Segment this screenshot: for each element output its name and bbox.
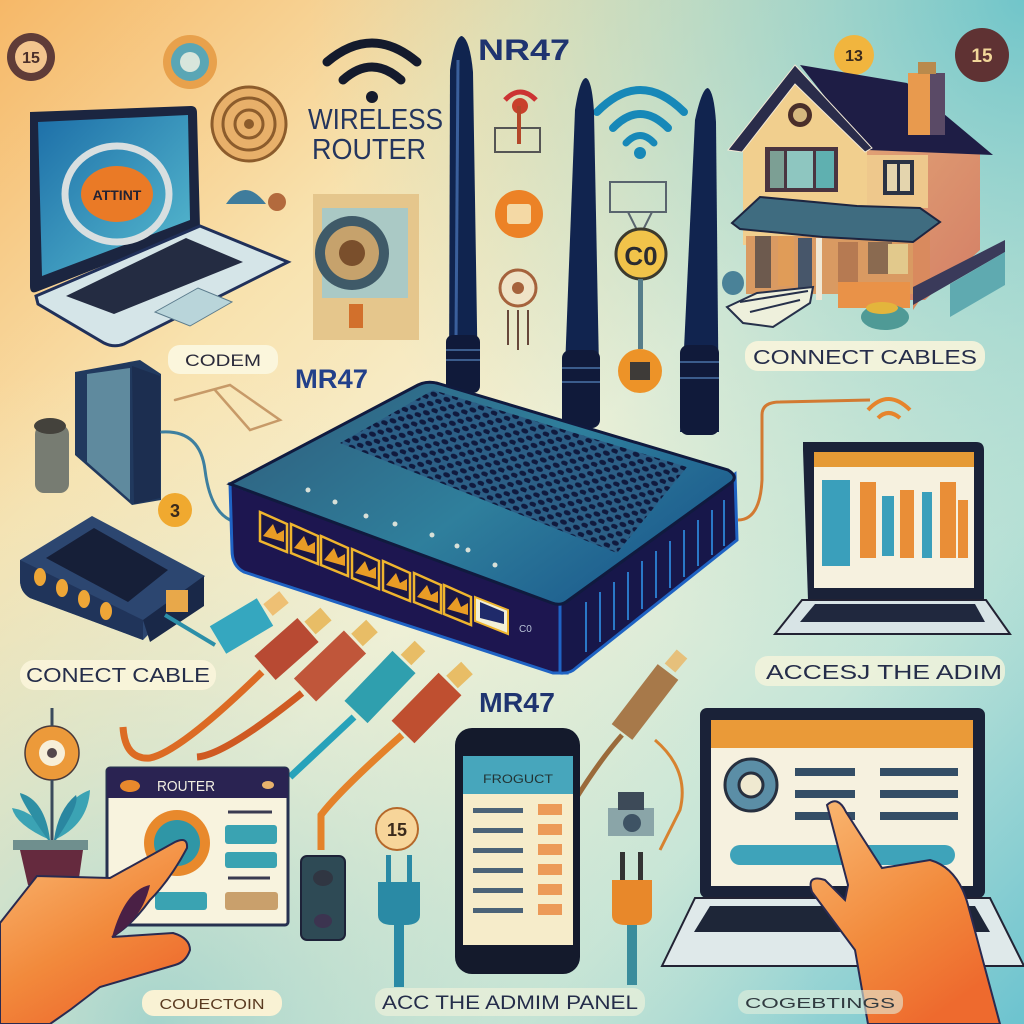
plug: teal [378, 855, 420, 987]
icon: round dial [212, 87, 286, 161]
label: access the admin [755, 656, 1005, 686]
hand right [811, 801, 1000, 1024]
label: NR47 top: NR47 [478, 34, 570, 67]
badge: top left 15: 15 [22, 50, 40, 67]
icon: wifi dark [327, 43, 417, 103]
heading: wireless router [308, 104, 443, 166]
icon: box sketch [610, 182, 666, 236]
label: connect cables: CONNECT CABLES [753, 347, 977, 369]
badge: top right 15: 15 [971, 46, 993, 67]
icon: small connector [226, 190, 286, 211]
label: connection: COUECTOIN [160, 996, 264, 1013]
phone [455, 728, 580, 974]
badge: 15 bottom [376, 808, 418, 850]
sketch: wires [162, 385, 280, 520]
cable: orange [123, 614, 326, 758]
phone: FROGUCT [483, 772, 554, 786]
label: conect cable [20, 660, 216, 690]
icon: small wifi right [868, 399, 910, 418]
label: connect cables [745, 341, 985, 371]
router ports [260, 512, 508, 634]
router speckled vent [340, 390, 687, 553]
house [722, 62, 1005, 330]
badge: 3 [158, 493, 192, 527]
badge: 15 bottom: 15 [387, 820, 407, 840]
main router: C0 [519, 624, 532, 635]
modem device left [34, 360, 161, 505]
icon: target dial top [163, 35, 217, 89]
plug: orange [612, 852, 652, 985]
connector box [301, 856, 345, 940]
router front face [230, 484, 567, 673]
label: acc the admin panel: ACC THE ADMIM PANEL [382, 993, 638, 1014]
label: MR47 middle: MR47 [295, 364, 368, 394]
icon: yellow timer [616, 229, 666, 393]
label: codem [168, 345, 278, 374]
label: cosettings [738, 990, 903, 1014]
badge: top right 15 [955, 28, 1009, 82]
cable: teal [290, 646, 420, 777]
laptop bottom right [662, 708, 1024, 966]
heading: wireless router: ROUTER [312, 134, 426, 166]
laptop top left [30, 106, 288, 346]
wire: orange right [655, 740, 682, 850]
label: codem: CODEM [185, 351, 261, 370]
panel: fan speaker [313, 194, 419, 340]
panel: router screen: ROUTER [157, 778, 215, 795]
wire to laptop [738, 400, 870, 520]
badge: 3: 3 [170, 501, 180, 521]
antennas [446, 36, 719, 435]
icon: usb lock [608, 792, 654, 836]
heading: wireless router: WIRELESS [308, 104, 443, 136]
label: cosettings: COGEBTINGS [745, 995, 895, 1012]
label: conect cable: CONECT CABLE [26, 665, 210, 687]
label: acc the admin panel [375, 988, 645, 1016]
panel: router screen [107, 768, 288, 925]
cable: brown right [575, 654, 682, 800]
cable: orange red 2 [321, 668, 467, 850]
main router [230, 382, 737, 673]
hand left [0, 840, 190, 1024]
cable: red [197, 626, 372, 757]
icon: flower pot with dial [12, 708, 90, 885]
router top [230, 382, 734, 604]
small router left [20, 516, 205, 642]
badge: 13: 13 [845, 48, 863, 65]
column of icons between antennas [495, 92, 543, 350]
router right vents [560, 474, 737, 673]
laptop top left: ATTINT [93, 187, 142, 203]
label: access the admin: ACCESJ THE ADIM [766, 662, 1002, 684]
label: MR47 lower: MR47 [479, 687, 555, 718]
label: connection [142, 990, 282, 1016]
badge: top left 15 [7, 33, 55, 81]
cable: teal small [165, 597, 284, 645]
laptop right [775, 442, 1010, 634]
icon: wifi blue [597, 90, 684, 159]
badge: 13 [834, 35, 874, 75]
icon: yellow timer: C0 [624, 241, 658, 271]
